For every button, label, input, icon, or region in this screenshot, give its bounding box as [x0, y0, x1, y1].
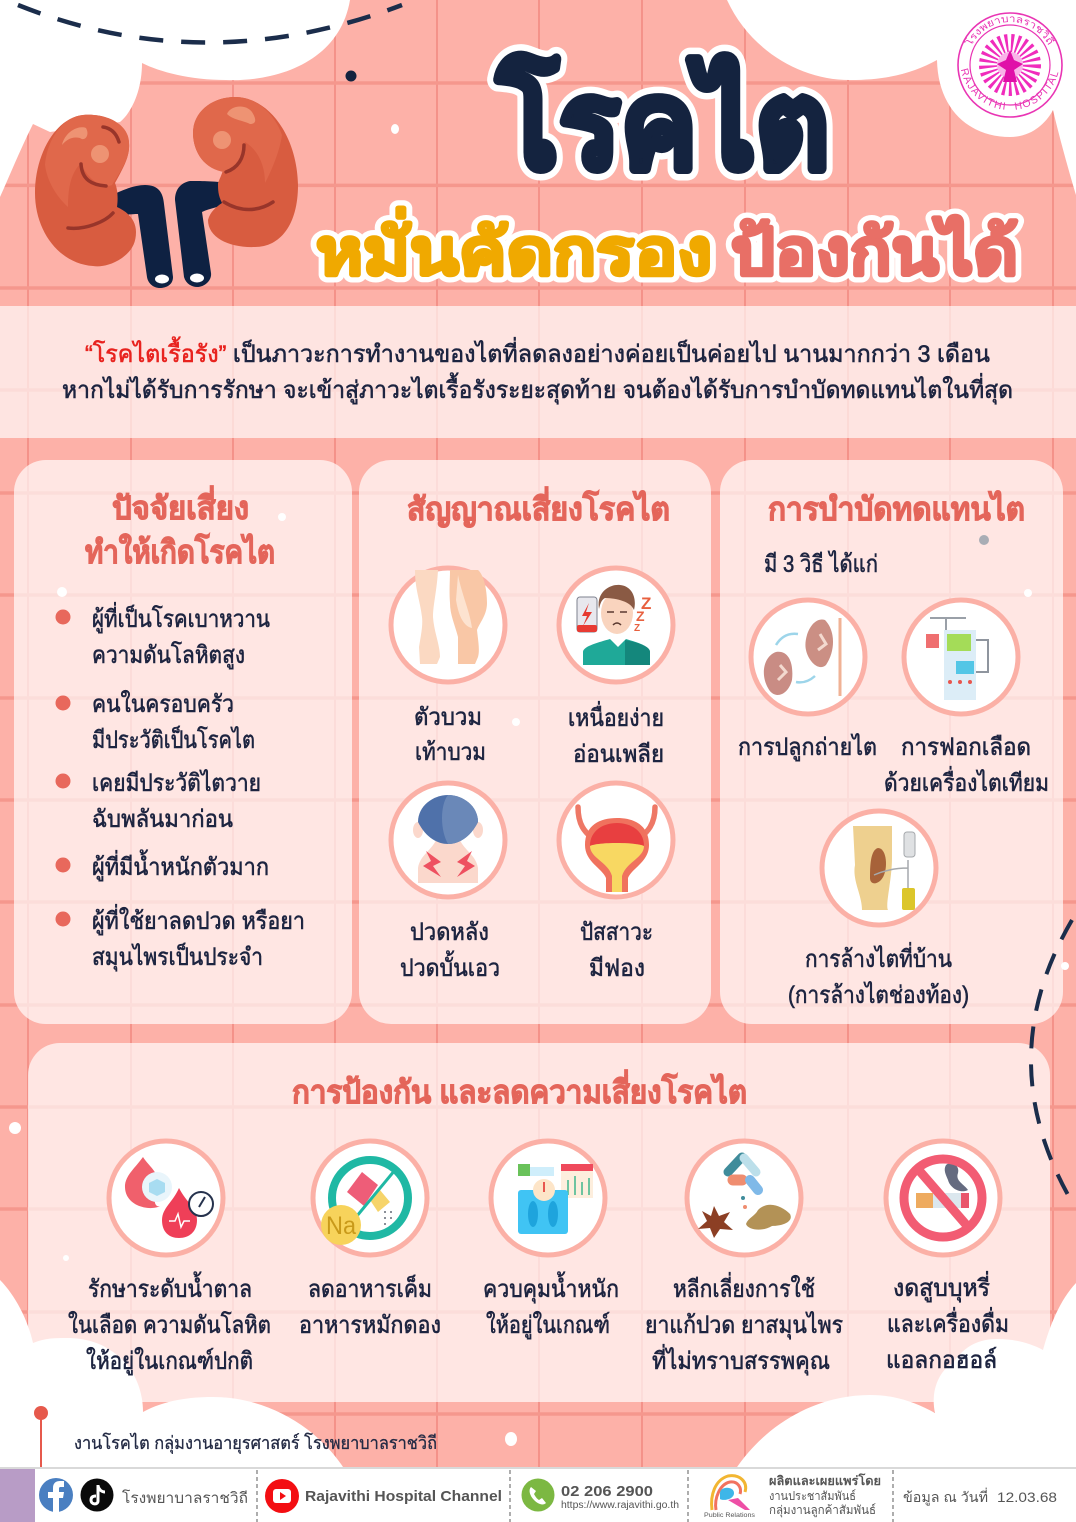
list: risk factors: เคยมีประวัติไตวาย — [92, 769, 261, 797]
subtitle: ป้องกันได้ — [731, 215, 1018, 288]
caption: ให้อยู่ในเกณฑ์ปกติ — [86, 1347, 253, 1376]
caption: หลีกเลี่ยงการใช้ — [673, 1272, 815, 1303]
caption — [299, 1274, 441, 1339]
intro band background — [0, 306, 1076, 438]
caption — [483, 1271, 619, 1340]
heading: therapy: การบำบัดทดแทนไต — [768, 490, 1025, 527]
caption: ควบคุมน้ำหนัก — [483, 1271, 619, 1304]
footer text: data date: ข้อมูล ณ วันที่ — [903, 1488, 988, 1506]
caption: แอลกอฮอล์ — [886, 1346, 997, 1374]
dashed arc: right — [1031, 920, 1072, 1202]
icon: tired person: Z — [641, 594, 651, 613]
icon: no smoking — [886, 1141, 1000, 1255]
icon: youtube — [265, 1479, 299, 1513]
icon: reduce salt — [313, 1141, 427, 1255]
footer text: producer: งานประชาสัมพันธ์ — [769, 1489, 856, 1503]
dashed arc: top — [18, 5, 402, 42]
logo: public relations: Public Relations — [704, 1513, 755, 1519]
caption: การฟอกเลือด — [901, 734, 1031, 761]
icon: back pain — [391, 783, 505, 897]
list: risk factors: ผู้ที่เป็นโรคเบาหวาน — [92, 602, 270, 634]
logo: Rajavithi Hospital — [957, 12, 1063, 118]
list: risk factors: มีประวัติเป็นโรคไต — [92, 725, 255, 754]
caption: (การล้างไตช่องท้อง) — [788, 981, 969, 1009]
icon: phone — [522, 1478, 554, 1512]
caption: อาหารหมักดอง — [299, 1312, 441, 1339]
footer text: data date — [903, 1488, 1057, 1506]
caption — [645, 1272, 843, 1376]
caption: ปวดบั้นเอว — [400, 950, 500, 982]
list: risk factors — [56, 602, 305, 972]
caption — [568, 701, 664, 768]
panel: risk factors — [56, 485, 305, 972]
title: โรคไต — [495, 54, 830, 195]
caption: มีฟอง — [589, 955, 645, 982]
icon: peritoneal dialysis — [822, 811, 936, 925]
caption — [580, 919, 653, 982]
list: risk factors: สมุนไพรเป็นประจำ — [92, 942, 263, 972]
icon: tiktok — [80, 1478, 114, 1512]
subtitle: หมั่นคัดกรอง — [316, 207, 712, 288]
caption: ด้วยเครื่องไตเทียม — [884, 766, 1049, 797]
icon: swollen legs — [391, 568, 505, 682]
logo: public relations — [704, 1476, 755, 1519]
heading: risk factors — [85, 485, 275, 570]
icon: foamy urine bladder — [559, 783, 673, 897]
footer text: hospital name: โรงพยาบาลราชวิถี — [122, 1489, 248, 1507]
caption: เท้าบวม — [415, 739, 486, 766]
footer text: data date: 12.03.68 — [997, 1489, 1057, 1505]
list: risk factors: คนในครอบครัว — [92, 690, 234, 718]
icon: kidneys — [35, 97, 298, 288]
cloud: top right — [727, 0, 1076, 195]
icon: facebook — [39, 1478, 73, 1512]
footer text: phone number: 02 206 2900 — [561, 1483, 653, 1500]
logo: Rajavithi Hospital: โรงพยาบาลราชวิถี — [964, 16, 1055, 45]
caption: ปัสสาวะ — [580, 919, 653, 946]
heading: risk factors: ปัจจัยเสี่ยง — [112, 485, 249, 526]
footer text: producer: กลุ่มงานลูกค้าสัมพันธ์ — [769, 1503, 876, 1518]
caption — [788, 942, 969, 1009]
icon: blood sugar and pressure — [109, 1141, 223, 1255]
icon: tired person: Z — [636, 608, 645, 624]
caption: การปลูกถ่ายไต — [738, 733, 877, 762]
footer text: producer — [769, 1473, 881, 1518]
panel: warning signs background — [359, 460, 711, 1024]
subtitle — [316, 207, 1018, 288]
panel: renal replacement therapy — [738, 490, 1049, 1009]
footer text: website: https://www.rajavithi.go.th — [561, 1500, 679, 1511]
heading: risk factors: ทำให้เกิดโรคไต — [85, 533, 275, 570]
subheading: มี 3 วิธี ได้แก่ — [764, 550, 878, 578]
caption: ในเลือด ความดันโลหิต — [68, 1311, 271, 1339]
panel: risk factors background — [14, 460, 352, 1024]
caption: ลดอาหารเค็ม — [308, 1274, 432, 1303]
icon: tired person: Z — [634, 623, 640, 634]
footer text: channel: Rajavithi Hospital Channel — [305, 1488, 502, 1505]
list: risk factors: ฉับพลันมาก่อน — [92, 806, 233, 833]
cloud: bottom right — [735, 1283, 1076, 1470]
icon: tired person — [559, 568, 673, 682]
caption: และเครื่องดื่ม — [887, 1307, 1009, 1338]
caption — [400, 919, 500, 982]
footer bar — [0, 1467, 1076, 1522]
intro text: หากไม่ได้รับการรักษา จะเข้าสู่ภาวะไตเรื้อรังระยะสุดท้าย จนต้องได้รับการบำบัดทดแทนไตในที่สุด — [62, 372, 1013, 405]
subtitle: หมั่นคัดกรอง — [316, 207, 712, 288]
caption: อ่อนเพลีย — [573, 741, 664, 768]
icon: medicine and herbs — [687, 1141, 801, 1255]
cloud: top left — [0, 0, 350, 197]
icon: weight scale — [491, 1141, 605, 1255]
cloud: bottom left — [0, 1280, 345, 1470]
caption: งดสูบบุหรี่ — [893, 1271, 990, 1303]
title: โรคไต — [495, 54, 830, 195]
caption — [884, 734, 1049, 797]
source credit: งานโรคไต กลุ่มงานอายุรศาสตร์ โรงพยาบาลราชวิถี — [74, 1432, 437, 1454]
caption: การล้างไตที่บ้าน — [805, 942, 952, 973]
caption — [886, 1271, 1009, 1374]
dot: navy — [346, 70, 356, 82]
list: risk factors: ความดันโลหิตสูง — [92, 641, 245, 670]
caption: เหนื่อยง่าย — [568, 701, 664, 732]
panel: prevention — [68, 1069, 1009, 1376]
panel: renal replacement background — [720, 460, 1063, 1024]
logo: Rajavithi Hospital: RAJAVITHI HOSPITAL — [961, 68, 1058, 110]
panel: prevention background — [28, 1043, 1050, 1402]
list: risk factors: ผู้ที่มีน้ำหนักตัวมาก — [92, 849, 269, 882]
heading: warning signs: สัญญาณเสี่ยงโรคไต — [407, 486, 670, 528]
icon: reduce salt: Na — [326, 1212, 356, 1240]
caption — [68, 1271, 271, 1376]
footer text: producer: ผลิตและเผยแพร่โดย — [769, 1473, 881, 1488]
caption: ให้อยู่ในเกณฑ์ — [486, 1311, 610, 1340]
icon: dialysis machine — [904, 600, 1018, 714]
source pin — [34, 1406, 48, 1470]
caption — [414, 704, 486, 766]
caption: ตัวบวม — [414, 704, 482, 731]
caption: รักษาระดับน้ำตาล — [88, 1271, 252, 1303]
panel: warning signs — [391, 486, 673, 982]
list: risk factors: ผู้ที่ใช้ยาลดปวด หรือยา — [92, 904, 305, 936]
heading: prevention: การป้องกัน และลดความเสี่ยงโรคไต — [292, 1069, 747, 1110]
icon: kidney transplant — [751, 600, 865, 714]
intro text: “โรคไตเรื้อรัง” เป็นภาวะการทำงานของไตที่ลดลงอย่างค่อยเป็นค่อยไป นานมากกว่า 3 เดือน — [85, 336, 990, 368]
caption: ที่ไม่ทราบสรรพคุณ — [652, 1344, 830, 1376]
subtitle: ป้องกันได้ — [731, 215, 1018, 288]
caption: ปวดหลัง — [410, 919, 489, 946]
intro text — [62, 336, 1013, 405]
caption: ยาแก้ปวด ยาสมุนไพร — [645, 1311, 843, 1340]
